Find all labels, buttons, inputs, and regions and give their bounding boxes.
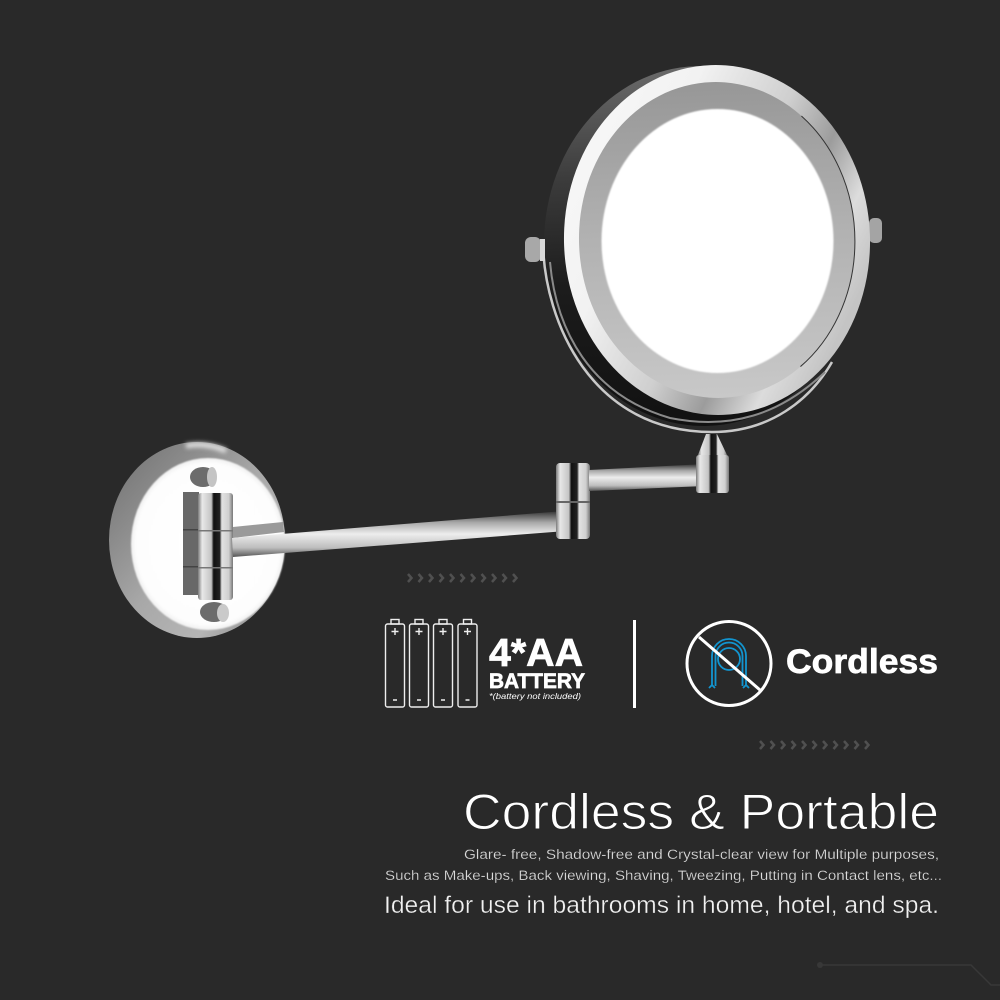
mirror bracket post (696, 434, 729, 493)
bracket yoke (543, 245, 832, 432)
round mirror (525, 60, 882, 432)
title: Cordless & Portable (463, 784, 939, 840)
battery icons (386, 620, 477, 707)
battery 3 (434, 620, 452, 707)
long arm (232, 511, 566, 557)
right knob (869, 218, 882, 243)
yoke chrome band (550, 262, 825, 422)
left knob (525, 237, 545, 262)
battery 1 (386, 620, 404, 707)
tagline: Ideal for use in bathrooms in home, hotel, and spa. (384, 892, 939, 919)
battery label: *(battery not included) (489, 691, 581, 701)
battery 4 (458, 620, 477, 707)
mirror rim (558, 60, 876, 420)
battery label: BATTERY (489, 670, 585, 693)
chevron row 2 (760, 741, 868, 749)
wall mount plate (109, 442, 285, 638)
description: Such as Make-ups, Back viewing, Shaving, Tweezing, Putting in Contact lens, etc... (385, 868, 942, 883)
elbow joint (556, 463, 590, 539)
battery label (489, 632, 585, 701)
battery 2 (410, 620, 428, 707)
cordless label: Cordless (786, 643, 938, 681)
icon: no cord (687, 622, 771, 706)
decorative corner line (817, 962, 1000, 985)
mirror back housing (538, 61, 866, 431)
blue coiled cable (709, 639, 749, 688)
arm back bracket (233, 522, 284, 538)
frosted light ring (574, 77, 860, 403)
battery label: 4*AA (489, 632, 583, 675)
chevron row 1 (408, 574, 516, 582)
bottom screw (200, 602, 229, 622)
short arm (589, 464, 705, 491)
description: Glare- free, Shadow-free and Crystal-clear view for Multiple purposes, (464, 847, 939, 862)
vertical divider (633, 620, 636, 708)
description (385, 847, 942, 883)
hinge cylinder (198, 493, 233, 600)
top screw (190, 467, 217, 487)
mirror glass (602, 109, 834, 373)
ring inner shadow line (792, 114, 859, 367)
